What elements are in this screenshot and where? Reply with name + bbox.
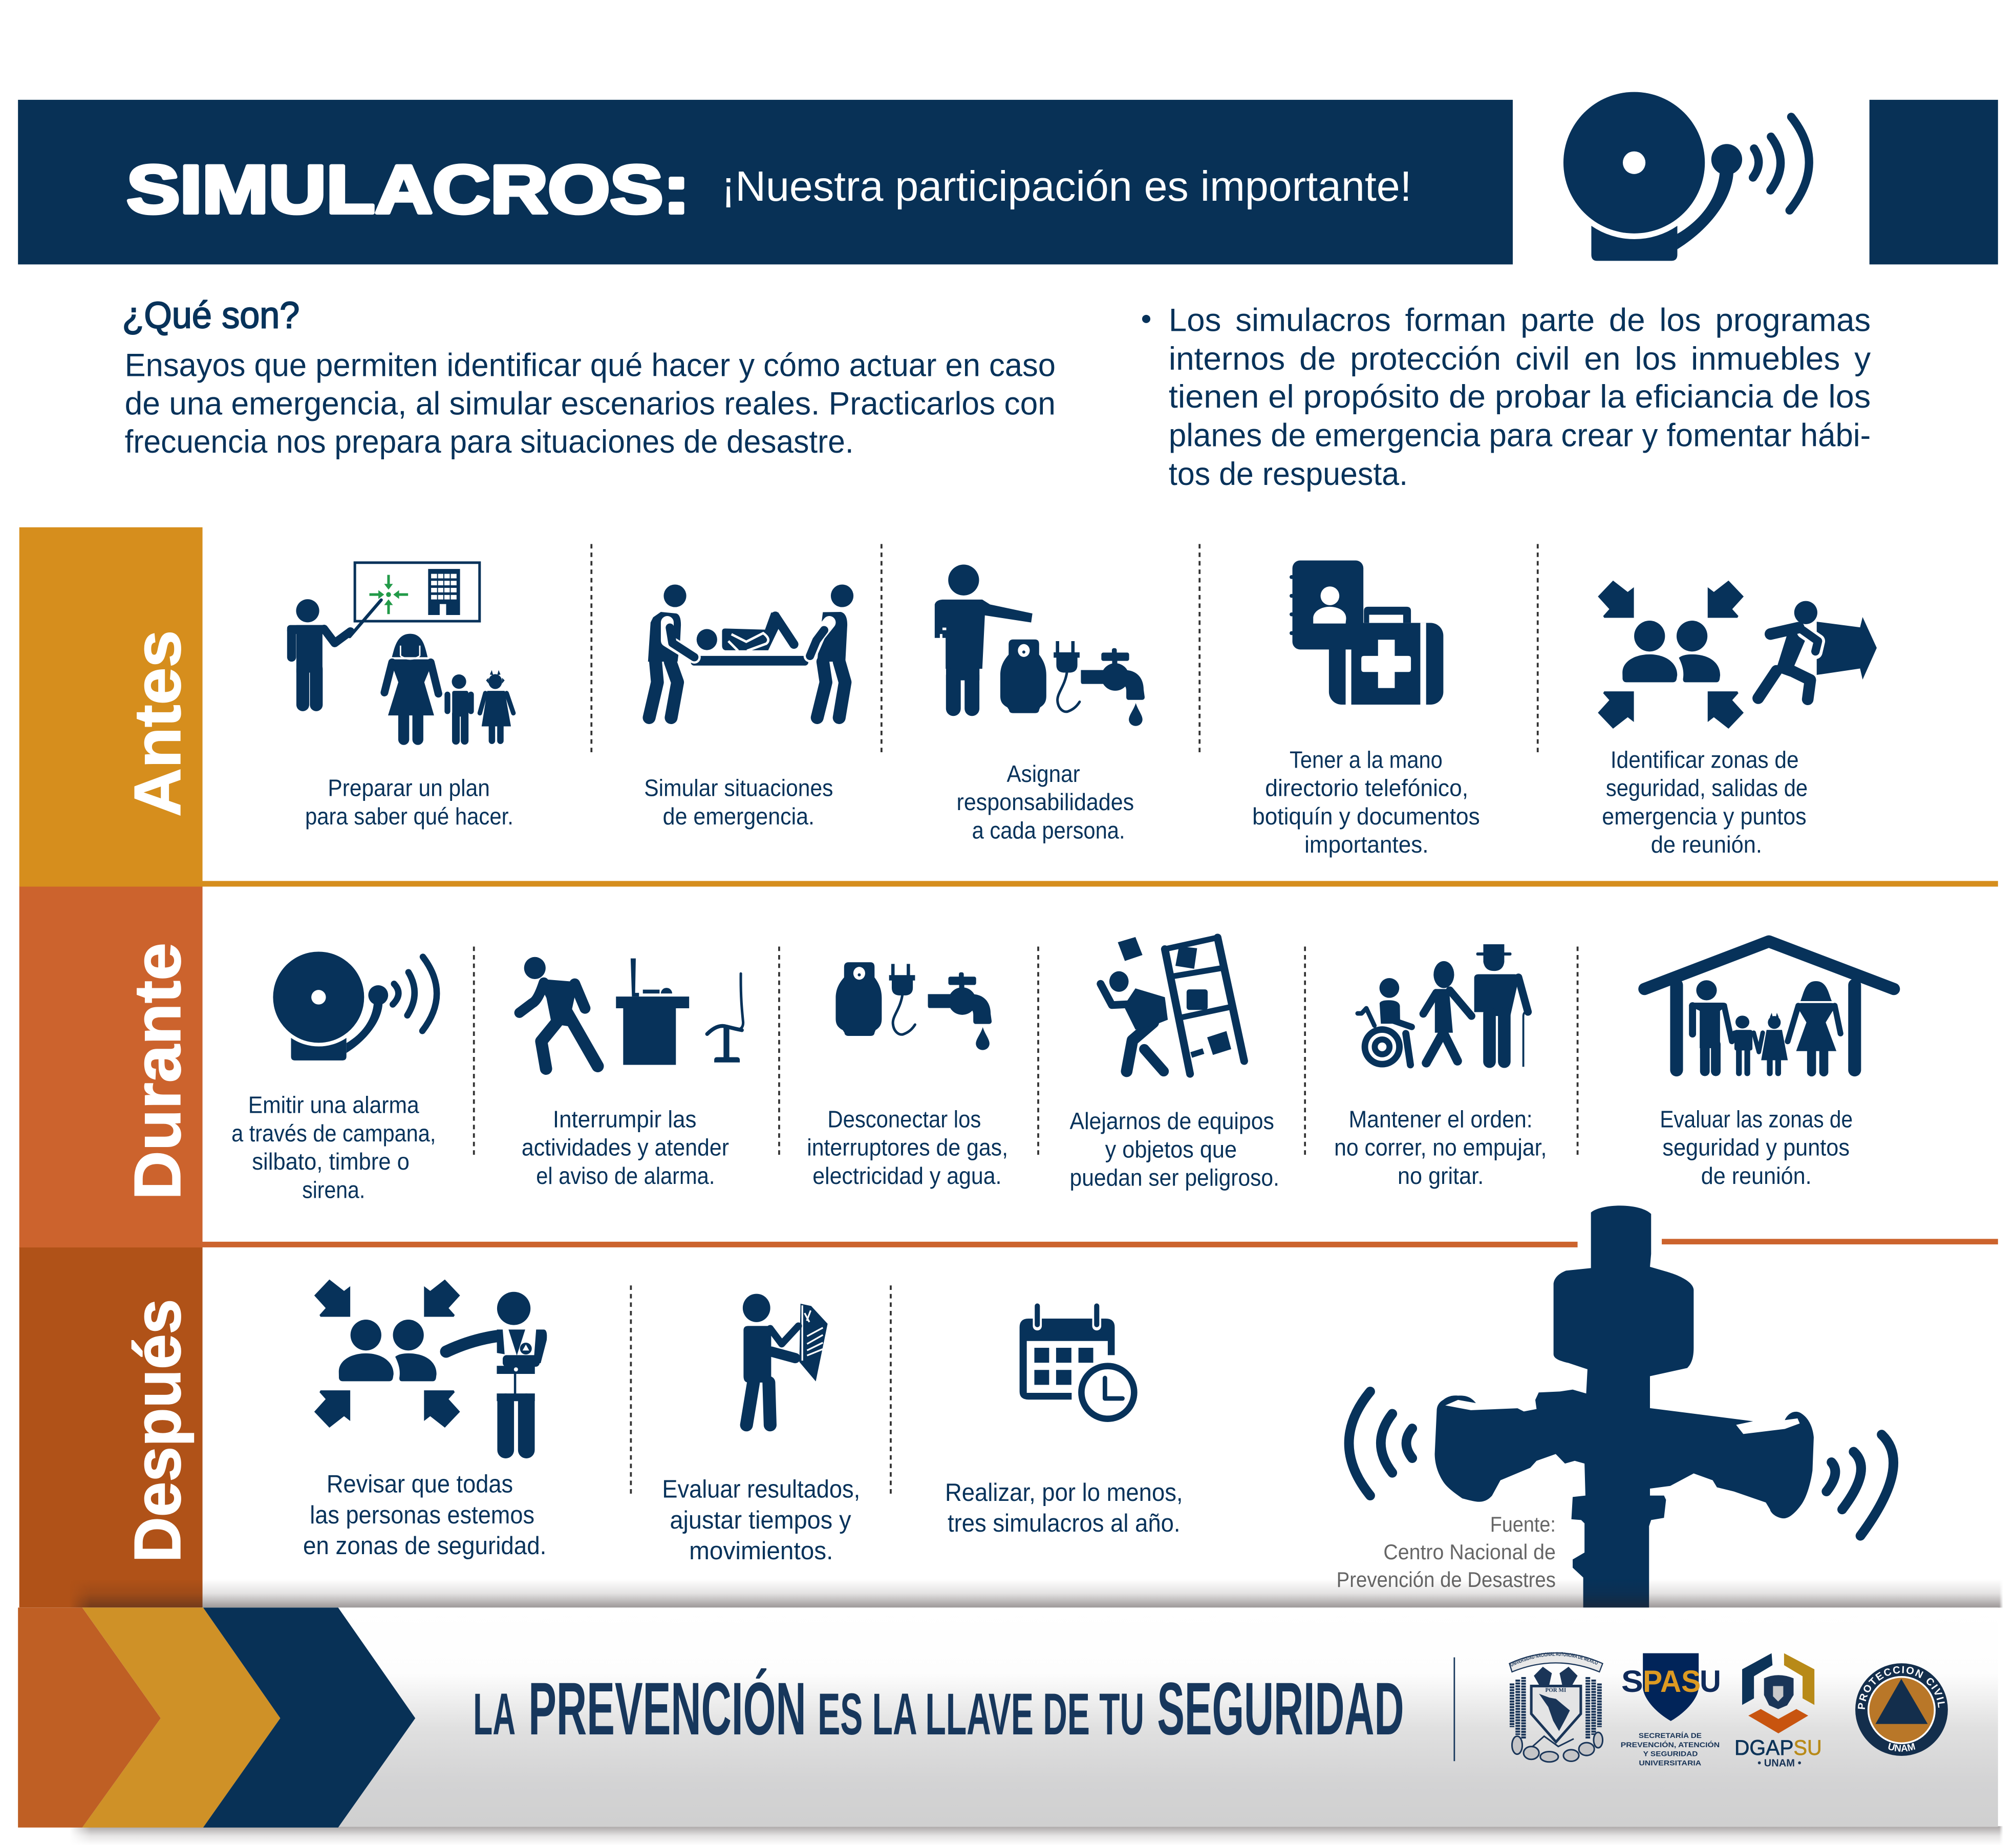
purpose paragraph: internos de protección civil en los inmuebles y — [1169, 341, 1871, 377]
source note — [1337, 1512, 1556, 1592]
footer background — [18, 1607, 1998, 1827]
definition paragraph — [125, 348, 1056, 460]
caption: realizar tres simulacros — [945, 1479, 1183, 1537]
logo: SPASU: S — [1621, 1664, 1643, 1699]
caption: desconectar interruptores — [807, 1106, 1008, 1189]
chevron: orange — [18, 1607, 161, 1828]
caption: alejarnos de equipos: Alejarnos de equipos — [1070, 1108, 1274, 1134]
icon: meeting point and runner with exit arrow — [1598, 581, 1877, 729]
logo: UNAM crest: UNIVERSIDAD NACIONAL AUTONOMA DE MEXICO — [1510, 1652, 1598, 1666]
panel: Antes — [19, 527, 1998, 887]
caption: asignar responsabilidades: responsabilidades — [957, 789, 1134, 815]
logo: DGAPSU: SU — [1794, 1735, 1822, 1759]
Después label: Después — [121, 1299, 195, 1562]
purpose paragraph: tienen el propósito de probar la eficiancia de los — [1169, 379, 1871, 415]
source note: Prevención de Desastres — [1337, 1567, 1556, 1592]
caption: desconectar interruptores: Desconectar los — [827, 1106, 981, 1132]
caption: simular situaciones: Simular situaciones — [644, 775, 833, 801]
Durante bottom rule: right — [1662, 1239, 1998, 1244]
bullet — [1142, 315, 1150, 323]
purpose paragraph — [1169, 303, 1871, 492]
caption: emitir una alarma: sirena. — [302, 1176, 365, 1203]
caption: preparar un plan — [305, 775, 513, 830]
icon: alarm bell — [1563, 92, 1809, 261]
caption: alejarnos de equipos: puedan ser peligroso. — [1070, 1164, 1279, 1191]
icon: siren tower — [1349, 1205, 1894, 1607]
slogan: PREVENCIÓN — [528, 1667, 806, 1750]
header bar: right — [1870, 100, 1998, 264]
icon: directory and first-aid kit — [1290, 561, 1443, 705]
Durante side column — [19, 886, 203, 1248]
icon: person reading results document — [743, 1294, 828, 1425]
caption: simular situaciones: de emergencia. — [663, 803, 814, 830]
slogan: SEGURIDAD — [1157, 1667, 1404, 1750]
caption: interrumpir las actividades — [522, 1106, 729, 1189]
purpose paragraph: planes de emergencia para crear y fomentar hábi- — [1169, 417, 1871, 453]
icon: stretcher drill — [648, 584, 853, 717]
caption: asignar responsabilidades: Asignar — [1006, 760, 1080, 787]
icon: person leaving desk — [520, 957, 743, 1069]
Después side column — [19, 1247, 203, 1607]
caption: emitir una alarma — [231, 1092, 436, 1203]
header bar: left — [18, 100, 1513, 264]
icon: brigade member checking meeting point — [314, 1280, 547, 1450]
logo: SPASU: U — [1700, 1664, 1721, 1699]
logo: DGAPSU — [1734, 1653, 1822, 1769]
purpose paragraph: tos de respuesta. — [1169, 456, 1408, 492]
icon: wheelchair user, person and elder walking — [1358, 944, 1528, 1068]
logo: UNAM crest — [1509, 1652, 1603, 1763]
caption: desconectar interruptores: interruptores de gas, — [807, 1134, 1008, 1161]
caption: tener a la mano: Tener a la mano — [1290, 746, 1443, 773]
Antes label: Antes — [121, 630, 195, 817]
caption: preparar un plan: para saber qué hacer. — [305, 803, 513, 830]
subtitle: ¡Nuestra participación es importante! — [721, 162, 1412, 210]
chevron: navy — [203, 1607, 415, 1828]
logo: DGAPSU: • UNAM • — [1757, 1758, 1801, 1769]
purpose paragraph: Los simulacros forman parte de los programas — [1169, 303, 1871, 338]
footer shadow: top — [72, 1583, 2003, 1608]
caption: revisar que todas: Revisar que todas — [327, 1471, 513, 1498]
caption: tener a la mano: directorio telefónico, — [1265, 775, 1468, 801]
caption: identificar zonas: de reunión. — [1651, 831, 1762, 858]
caption: interrumpir las actividades: el aviso de alarma. — [536, 1162, 715, 1189]
caption: asignar responsabilidades: a cada persona. — [972, 817, 1125, 844]
logo: SPASU: SECRETARÍA DE — [1639, 1732, 1702, 1740]
logo: SPASU: UNIVERSITARIA — [1639, 1759, 1701, 1767]
title: SIMULACROS: — [126, 152, 690, 228]
caption: desconectar interruptores: electricidad y agua. — [812, 1162, 1001, 1189]
caption: evaluar las zonas: Evaluar las zonas de — [1660, 1106, 1853, 1132]
logo: Protección Civil UNAM — [1855, 1663, 1948, 1756]
footer banner — [18, 1607, 1998, 1828]
icon: alarm bell — [273, 951, 437, 1061]
caption: emitir una alarma: Emitir una alarma — [248, 1092, 419, 1118]
caption: emitir una alarma: a través de campana, — [231, 1120, 436, 1147]
caption: mantener el orden — [1334, 1106, 1547, 1189]
intro: purpose bullet — [1142, 303, 1871, 492]
caption: identificar zonas: seguridad, salidas de — [1606, 775, 1808, 801]
caption: mantener el orden: no gritar. — [1398, 1162, 1484, 1189]
Antes bottom rule — [202, 881, 1998, 886]
caption: revisar que todas: en zonas de seguridad. — [303, 1532, 546, 1560]
caption: alejarnos de equipos: y objetos que — [1105, 1136, 1237, 1162]
caption: simular situaciones — [644, 775, 833, 830]
chevron: gold — [82, 1607, 281, 1828]
caption: realizar tres simulacros: Realizar, por lo menos, — [945, 1479, 1183, 1507]
icon: person with gas, plug and tap — [935, 565, 1145, 726]
Durante label: Durante — [121, 943, 195, 1200]
header banner — [18, 92, 1998, 264]
icon: presenter with evacuation plan and family — [287, 563, 513, 741]
caption: evaluar resultados — [662, 1476, 860, 1565]
caption: revisar que todas: las personas estemos — [310, 1501, 534, 1529]
caption: evaluar las zonas — [1660, 1106, 1853, 1189]
panel: Después — [19, 1205, 1894, 1607]
caption: identificar zonas: Identificar zonas de — [1611, 746, 1799, 773]
caption: identificar zonas — [1602, 746, 1808, 858]
caption: evaluar las zonas: seguridad y puntos — [1662, 1134, 1850, 1161]
icon: calendar and clock — [1020, 1306, 1134, 1419]
footer shadow: bottom — [72, 1826, 2003, 1842]
definition paragraph: frecuencia nos prepara para situaciones de desastre. — [125, 424, 854, 460]
logo: SPASU — [1621, 1653, 1721, 1767]
icon: person avoiding falling objects — [1101, 937, 1244, 1074]
logo: SPASU: PREVENCIÓN, ATENCIÓN — [1621, 1741, 1720, 1749]
slogan — [473, 1667, 1404, 1750]
logo: UNAM crest: POR MI — [1545, 1687, 1566, 1693]
caption: identificar zonas: emergencia y puntos — [1602, 803, 1807, 830]
logo: Protección Civil UNAM: UNAM — [1888, 1743, 1916, 1752]
caption: realizar tres simulacros: tres simulacros al año. — [948, 1510, 1181, 1537]
definition paragraph: Ensayos que permiten identificar qué hacer y cómo actuar en caso — [125, 348, 1056, 384]
definition paragraph: de una emergencia, al simular escenarios reales. Practicarlos con — [125, 386, 1056, 421]
icon: gas tank, plug and water tap — [835, 962, 992, 1050]
caption: evaluar resultados: ajustar tiempos y — [670, 1507, 851, 1534]
logo: Protección Civil UNAM: PROTECCION CIVIL — [1858, 1666, 1945, 1709]
caption: tener a la mano: importantes. — [1304, 831, 1429, 858]
logo: SPASU: Y SEGURIDAD — [1643, 1750, 1698, 1757]
caption: mantener el orden: Mantener el orden: — [1349, 1106, 1533, 1132]
caption: mantener el orden: no correr, no empujar, — [1334, 1134, 1547, 1161]
caption: interrumpir las actividades: actividades y atender — [522, 1134, 729, 1161]
Durante bottom rule: left — [202, 1242, 1578, 1247]
caption: emitir una alarma: silbato, timbre o — [252, 1148, 410, 1175]
caption: evaluar las zonas: de reunión. — [1701, 1162, 1812, 1189]
panel: Durante — [19, 886, 1998, 1248]
caption: revisar que todas — [303, 1471, 546, 1560]
caption: tener a la mano — [1252, 746, 1480, 858]
Antes side column — [19, 527, 203, 887]
heading: que son: ¿Qué son? — [122, 294, 299, 336]
logo: DGAPSU: DGAP — [1734, 1735, 1794, 1759]
slogan: ES LA LLAVE DE TU — [818, 1681, 1144, 1747]
caption: tener a la mano: botiquín y documentos — [1252, 803, 1480, 830]
slogan: LA — [473, 1681, 516, 1747]
caption: interrumpir las actividades: Interrumpir las — [553, 1106, 696, 1132]
source note: Centro Nacional de — [1383, 1540, 1556, 1564]
caption: evaluar resultados: Evaluar resultados, — [662, 1476, 860, 1503]
source note: Fuente: — [1490, 1512, 1556, 1536]
logo: SPASU: PAS — [1643, 1664, 1701, 1699]
caption: evaluar resultados: movimientos. — [689, 1537, 833, 1565]
icon: family in safe house — [1644, 941, 1894, 1073]
intro: what are they — [122, 294, 1056, 460]
caption: preparar un plan: Preparar un plan — [328, 775, 490, 801]
caption: alejarnos de equipos — [1070, 1108, 1279, 1191]
caption: asignar responsabilidades — [957, 760, 1134, 844]
